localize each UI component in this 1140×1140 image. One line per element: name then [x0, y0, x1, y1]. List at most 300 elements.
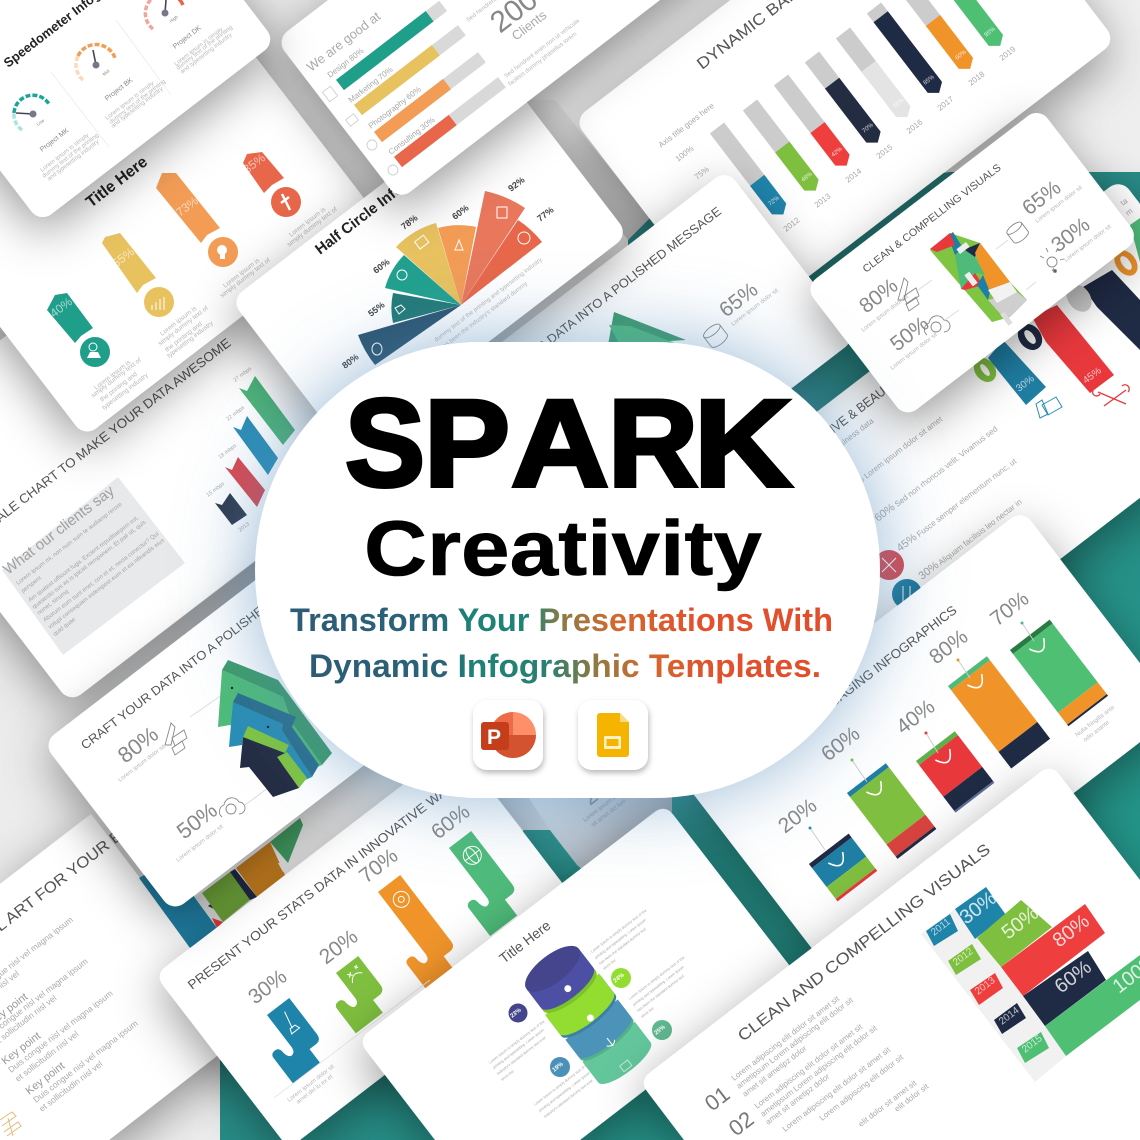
wedge icons [372, 207, 530, 355]
card background [0, 0, 376, 437]
wedge labels: 92% [506, 175, 527, 194]
percent labels with leader dots: 40% [892, 695, 939, 739]
icon: cloud search [219, 798, 245, 817]
stat caption: Lorem ipsum dolor sit [731, 288, 780, 328]
heading: PRESENT YOUR STATS DATA IN INNOVATIVE WAYS [185, 773, 464, 992]
text blocks: industry's standard dummy text ever [496, 1035, 547, 1076]
quote box: quid quae [53, 616, 78, 638]
project captions: dummy text of the printing [176, 25, 234, 72]
panel: key points slide [0, 782, 254, 1140]
text blocks: printing and typesetting. Lorem Ipsum [492, 1028, 545, 1070]
badge 23 percent: 23% [510, 1007, 523, 1020]
year tag 2015: 2015 [1020, 1033, 1045, 1055]
numbered list: ametipsum Lorem adipiscing elit dolor sit [759, 1023, 879, 1119]
bag 80 percent [948, 656, 1050, 769]
project labels [39, 24, 203, 154]
dividers [51, 20, 171, 147]
project captions: Lorem ipsum is simply [105, 81, 155, 122]
captions: simply dummy text of [219, 257, 272, 300]
stat 50 percent: 50% [886, 312, 933, 356]
text blocks: printing and typesetting. Lorem Ipsum [632, 965, 685, 1007]
icon: database [701, 322, 730, 350]
consulting bar [394, 77, 506, 167]
red arrow with icon: 35% [240, 150, 268, 176]
wedge labels: 60% [371, 257, 392, 276]
bar 50 percent: 50% [998, 902, 1043, 944]
slide caption: Lorem ipsum dolor [583, 789, 626, 824]
panel: speedometer slide [0, 0, 276, 223]
gauge high: High [169, 14, 179, 24]
card background [363, 809, 796, 1140]
yellow arrow with icon [102, 233, 178, 321]
text blocks: industry's standard dummy text ever [543, 1078, 594, 1119]
numbered list: Lorem adipiscing elit dolor sit [818, 1052, 906, 1123]
heading: CLEAN & COMPELLING VISUALS [861, 162, 1003, 275]
percent labels [244, 800, 474, 1009]
card background [805, 107, 1139, 418]
text blocks: printing and typesetting. Lorem Ipsum [594, 918, 647, 960]
subtitle line two: Dynamic Infographic Templates. [309, 648, 821, 684]
slide surface [527, 795, 672, 872]
project labels: Project BK [104, 77, 135, 103]
stat 80 caption: Lorem ipsum dolor sit [861, 294, 910, 334]
project captions [40, 25, 234, 183]
captions: the printing and [99, 371, 139, 404]
rows of stats: 80% Lorem ipsum dolor sit amet [848, 414, 945, 492]
stat 30 caption: Lorem ipsum dolor sit [1064, 224, 1113, 264]
tube chart: 45% [1081, 365, 1104, 386]
stat label: Clients [509, 7, 550, 43]
quote box: nonet, sinumq [37, 589, 70, 617]
marketing bar [354, 25, 466, 115]
icon: buildings [898, 278, 919, 311]
J bar green [319, 956, 395, 1033]
badge 25 percent: 25% [654, 1024, 667, 1037]
year tag 2012: 2012 [951, 946, 976, 968]
caption line two: odio asante [1083, 720, 1111, 744]
heading: Title Here [496, 917, 554, 966]
bars [710, 0, 1007, 220]
numbered list: ametipsum Lorem adipiscing elit dolor sit [735, 995, 855, 1091]
heading: CRAFT YOUR DATA INTO A POLISHED MESSAGE [474, 204, 724, 400]
panel: title here cylinder slide [363, 809, 796, 1140]
key point list [0, 915, 140, 1114]
bar values: 60% [955, 49, 968, 62]
captions: simply dummy text of [90, 357, 143, 400]
panel: shopping bag infographic slide [678, 510, 1140, 977]
stat 65 caption: Lorem ipsum dolor sit [1035, 185, 1084, 225]
percent labels with leader dots [774, 587, 1034, 850]
key point list: et sollicitudin nisl vel [13, 1029, 80, 1084]
J bar blue [250, 998, 332, 1083]
bar labels: Photography 60% [367, 85, 423, 131]
icon: ruler and pencil [1036, 397, 1062, 418]
baseline [274, 980, 430, 1098]
numbered list: elit dolor sit amet sit [857, 1078, 919, 1129]
numbered list: Lorem adipiscing elit dolor sit amet sit [753, 1022, 865, 1111]
axis labels: 75% [693, 165, 711, 182]
quote box: volupi consequam estempost eum et ea nifeandis eius [48, 538, 166, 631]
text blocks: has been the standard dummy text [636, 973, 686, 1013]
badge 25 percent [652, 1020, 672, 1040]
captions: the printing and [164, 321, 204, 354]
text blocks: since the [602, 958, 617, 971]
bubble shape [255, 342, 880, 798]
project captions: dummy text of the printing [109, 79, 167, 126]
icon: PowerPoint tile [473, 700, 543, 770]
icon: Google Slides tile [578, 700, 648, 770]
panel: creative and beautiful slide with tube chart [724, 179, 1140, 693]
gauge mid [76, 45, 115, 80]
grey band beside half circle card [520, 100, 650, 240]
year labels: 2012 [782, 215, 802, 234]
rows of stats: 60% Sed non rhoncus velit. Vivamus sed [873, 423, 1000, 524]
stat text line two: facilisis dummy phasellus lorem [508, 31, 578, 88]
captions: Lorem ipsum is [159, 305, 199, 338]
teal patch under title bubble [523, 830, 577, 877]
stat text: Sed hendrerit enim non ut vehicula [504, 18, 581, 80]
key point list: Duis congue nisl vel magna ipsum [6, 988, 115, 1075]
grey band [70, 558, 280, 735]
year labels: 2019 [998, 44, 1018, 63]
stat 65 percent: 65% [1018, 176, 1065, 220]
key point list: et sollicitudin nisl vel [37, 1059, 104, 1114]
tube chart: 30% [1014, 373, 1037, 394]
panel: present your stats slide [160, 744, 589, 1140]
percent labels with leader dots: 20% [774, 794, 821, 838]
teal backing block [220, 172, 1140, 1140]
wedge labels: 80% [340, 352, 361, 371]
title: SPARK: K [694, 375, 792, 513]
half circle chart [358, 191, 542, 365]
gauge high [145, 0, 183, 29]
panel: half circle infographic slide [231, 84, 628, 451]
gauge mid: Mid [102, 68, 111, 77]
stat 50 percent: 50% [172, 797, 222, 844]
wedge labels [340, 175, 556, 371]
captions: simply dummy text of [157, 305, 210, 348]
project captions: dummy text of the printing [42, 133, 100, 180]
wedge labels: 78% [399, 213, 420, 232]
project captions: and typesetting industry [180, 32, 233, 76]
numbered list: Lorem adipiscing elit dolor sit amet sit [781, 1045, 893, 1134]
3D stacked arrows [218, 660, 332, 797]
grey band under title bubble [495, 795, 550, 830]
panel: polished message slide [330, 170, 856, 643]
panel: craft your data slide [43, 451, 553, 912]
axis labels: Axis title goes here [657, 101, 716, 150]
captions: simply dummy text of [286, 206, 339, 249]
quote box: Aborum eum sunt enet, con et et, necia conectur? Qui [43, 531, 160, 624]
project captions: and typesetting industry [47, 139, 100, 183]
grey chart panel [921, 909, 1066, 1082]
title: SPARK: A [511, 375, 609, 513]
axis labels [657, 101, 716, 182]
bar values [768, 26, 997, 208]
bar labels [326, 46, 437, 157]
text blocks: Lorem Ipsum is simply dummy text of the [488, 1020, 545, 1065]
percent labels: 30% [244, 965, 291, 1009]
bar 60 percent [1023, 951, 1106, 1026]
rows of stats: 45% Fusce semper elementum nunc, ut [895, 455, 1019, 554]
percent labels with leader dots: 60% [817, 722, 864, 766]
percent labels: 20% [315, 925, 362, 969]
bar values: 42% [831, 146, 844, 159]
gauge low: Low [36, 117, 46, 127]
icon: signpost [0, 1112, 21, 1136]
bar labels: Design 80% [326, 46, 365, 80]
panel: clean and compelling visuals list slide [644, 769, 1140, 1140]
bar 100 percent [1045, 949, 1140, 1056]
quote box [0, 477, 185, 655]
year tag 2014 [994, 1003, 1026, 1034]
badge 19 percent: 19% [552, 1061, 565, 1074]
numbered list: Lorem adipiscing elit dolor sit amet sit [730, 994, 842, 1083]
year tag 2014: 2014 [997, 1005, 1022, 1027]
numbered list [700, 994, 931, 1140]
card background [330, 170, 856, 643]
bar values: 72% [768, 195, 781, 208]
heading: We are good at [304, 8, 383, 74]
percent labels: 70% [355, 844, 402, 888]
text blocks: Lorem Ipsum is simply dummy text of the [628, 956, 685, 1001]
card background [724, 179, 1140, 693]
yellow arrow with icon: 55% [109, 244, 137, 270]
year labels: 2013 [813, 191, 833, 210]
subtitle line one: Transform Your Presentations With [290, 602, 833, 638]
captions: Lorem ipsum is [93, 359, 133, 392]
corner text: ta [1119, 196, 1130, 208]
design bar [336, 1, 447, 90]
captions: typesetting industry [166, 319, 215, 360]
stat 80 percent: 80% [113, 721, 163, 768]
stat 80 percent: 80% [855, 274, 902, 318]
numbered list: amet sit ametipz dolor [741, 1044, 809, 1099]
stat 50 caption: Lorem ipsum dolor sit [890, 332, 939, 372]
key point list: Duis congue nisl vel magna ipsum [31, 1018, 140, 1105]
heading: ENGAGING INFOGRAPHICS [811, 602, 960, 721]
icon: cloud search [924, 316, 950, 335]
bar labels: 15 mbps [206, 481, 226, 499]
captions: typesetting industry [101, 371, 150, 412]
bag 20 percent [809, 834, 877, 901]
badge 24 percent [611, 968, 631, 988]
year tag 2011 [926, 914, 958, 946]
badge 23 percent [508, 1004, 528, 1022]
teal arrow with icon: 40% [47, 294, 75, 320]
key point list: Key point [0, 1030, 43, 1067]
text blocks: has been the standard dummy text [598, 926, 648, 966]
green arrow [608, 312, 686, 345]
bar labels: 27 mbps [233, 366, 253, 384]
panel: clean and compelling visuals isometric slide [805, 107, 1139, 418]
bar values: 65% [893, 97, 906, 110]
bar values: 48% [801, 171, 814, 184]
jersey bars [215, 376, 295, 525]
rows of stats: 30% Aliquam facilisis leo nectar in [917, 496, 1024, 582]
heading: Half Circle Infographics [312, 142, 456, 258]
bar labels: Marketing 70% [347, 65, 395, 105]
project captions: Lorem ipsum is simply [174, 27, 224, 68]
title: SPARK: R [608, 375, 698, 513]
isometric blocks [930, 232, 1027, 326]
panel: dynamic bar chart slide [574, 0, 1116, 332]
numbered list: 02 [724, 1106, 758, 1140]
icon: PowerPoint tile: P [487, 726, 501, 749]
card background [231, 84, 628, 451]
project captions: and typesetting industry [111, 86, 164, 130]
heading: CREATIVE & BEAUTIFUL [795, 363, 915, 460]
leader lines [918, 240, 1036, 320]
card background [0, 0, 276, 223]
subheading: business data [831, 416, 876, 454]
badge 19 percent [550, 1057, 570, 1077]
bar values: 70% [862, 122, 875, 135]
J bar green large [432, 831, 529, 936]
project labels: Project DK [172, 24, 203, 51]
caption line two: amet del lu ex et [296, 1074, 334, 1106]
heading: CRAFT YOUR DATA INTO A POLISHED MESSAGE [78, 556, 328, 752]
card background [644, 769, 1140, 1140]
wedge labels: 55% [366, 300, 387, 319]
text blocks: printing and typesetting. Lorem Ipsum [538, 1071, 591, 1113]
icon: tools circle [874, 550, 904, 580]
stat 50 caption: Lorem ipsum dolor sit [176, 824, 225, 864]
orange arrow with icon: 73% [173, 193, 201, 219]
bar values: 95% [984, 26, 997, 39]
numbered list: amet sit ametipz dolor [764, 1072, 832, 1127]
stacked cylinder [517, 937, 658, 1091]
body text: dummy text of the printing and typesetting industry. [434, 256, 545, 344]
slide value: 20% [579, 766, 626, 810]
teal arrow with icon [47, 293, 114, 371]
bar 80 percent [1001, 904, 1105, 996]
icon: buildings [165, 723, 187, 755]
bag 70 percent [1010, 620, 1108, 726]
bar labels: 2013 [238, 521, 251, 534]
caption: Lorem ipsum dolor sit [287, 1064, 336, 1104]
stat 30 percent: 30% [1047, 213, 1094, 257]
year tag 2012 [948, 944, 981, 975]
card background [160, 744, 589, 1140]
quote box: quasiesto sus as is ipicati nemponem. Et pali sit, quis [32, 520, 147, 611]
percent labels with leader dots: 80% [925, 625, 972, 669]
project captions: Lorem ipsum is simply [40, 133, 90, 174]
text blocks [488, 909, 686, 1119]
project labels: Project MK [39, 127, 71, 154]
title: SPARK: S [345, 375, 425, 513]
orange arrow with icon [156, 173, 242, 271]
tube chart [969, 218, 1140, 405]
slide caption two: sit amet del lum [591, 798, 628, 829]
panel: scale chart slide [0, 124, 482, 735]
bar 30 percent: 30% [956, 887, 1001, 929]
bar labels: 22 mbps [226, 405, 246, 423]
numbered list: elit dolor sit [893, 1081, 931, 1114]
year labels [782, 44, 1018, 234]
card background [678, 510, 1140, 977]
bag 60 percent [847, 763, 936, 859]
quote box: Am quatest offiount fuga. Excient repuditaepem est, [28, 515, 141, 604]
badge 24 percent: 24% [613, 972, 626, 985]
rows of stats [848, 414, 1024, 582]
card background [276, 0, 812, 200]
year tag 2015 [1017, 1032, 1049, 1063]
percent labels with leader dots: 70% [986, 587, 1033, 631]
captions: Lorem ipsum is [222, 257, 262, 290]
quote box: What our clients say [0, 482, 118, 578]
year tag 2013: 2013 [973, 975, 998, 997]
card background [43, 451, 553, 912]
bar 80 percent: 80% [1049, 910, 1094, 952]
row icons [322, 86, 398, 175]
axis labels: 100% [674, 144, 695, 164]
text blocks: Lorem Ipsum is simply dummy text of the [533, 1062, 590, 1107]
stat 80 caption: Lorem ipsum dolor sit [118, 744, 167, 784]
leader lines [190, 688, 272, 805]
centre title bubble [255, 342, 880, 798]
year labels: 2014 [844, 166, 864, 185]
bar 60 percent: 60% [1051, 956, 1096, 998]
year labels: 2015 [875, 142, 895, 161]
heading: CLEAN AND COMPELLING VISUALS [735, 841, 994, 1045]
gauge low [14, 95, 49, 130]
year labels: 2016 [905, 117, 925, 136]
card background [574, 0, 1116, 332]
J bar orange [361, 875, 470, 996]
photography bar [374, 52, 486, 142]
numbered list: 01 [700, 1081, 734, 1116]
text blocks: since the [500, 1069, 515, 1082]
red arrow with icon [240, 150, 305, 221]
bar values: 85% [923, 74, 936, 87]
icon: light bulb [1040, 248, 1064, 272]
panel: skills bar slide [276, 0, 812, 200]
year tag 2013 [970, 973, 1003, 1005]
captions: Lorem ipsum is [288, 206, 328, 239]
percent labels: 60% [427, 800, 474, 844]
wedge labels: 60% [450, 203, 471, 222]
quote box: Lorem ipsum mi, non num sum te audiamp rerore [16, 501, 124, 587]
year tag 2011: 2011 [929, 916, 953, 938]
heading: Title Here [83, 153, 151, 211]
key point list: Key point [24, 1060, 67, 1097]
year labels: 2017 [936, 94, 956, 113]
bar labels: Consulting 30% [387, 115, 437, 157]
year labels: 2018 [967, 69, 987, 88]
captions [90, 206, 339, 412]
bar labels: 18 mbps [218, 443, 238, 461]
stat 65 percent: 65% [715, 278, 762, 322]
card background [0, 124, 482, 703]
wedge labels: 77% [535, 205, 556, 224]
corner text two: m [1124, 206, 1135, 218]
icon: wrench [1093, 385, 1129, 406]
hidden slide under title bubble [527, 766, 672, 872]
icon: pencil circle [892, 579, 922, 609]
body text line two: has been the industry's standard dummy [440, 281, 529, 352]
text blocks: Lorem Ipsum is simply dummy text of the [590, 909, 647, 954]
text blocks: since the [640, 1006, 655, 1019]
card background [0, 814, 254, 1140]
icon: database [1005, 220, 1030, 245]
partial chart beneath craft card [139, 818, 303, 948]
panel: title here arrow slide [0, 0, 376, 437]
title: Creativity: Creativity [364, 504, 762, 592]
title: SPARK [345, 375, 792, 513]
bag 40 percent [916, 731, 994, 813]
bar 50 percent [977, 900, 1052, 967]
